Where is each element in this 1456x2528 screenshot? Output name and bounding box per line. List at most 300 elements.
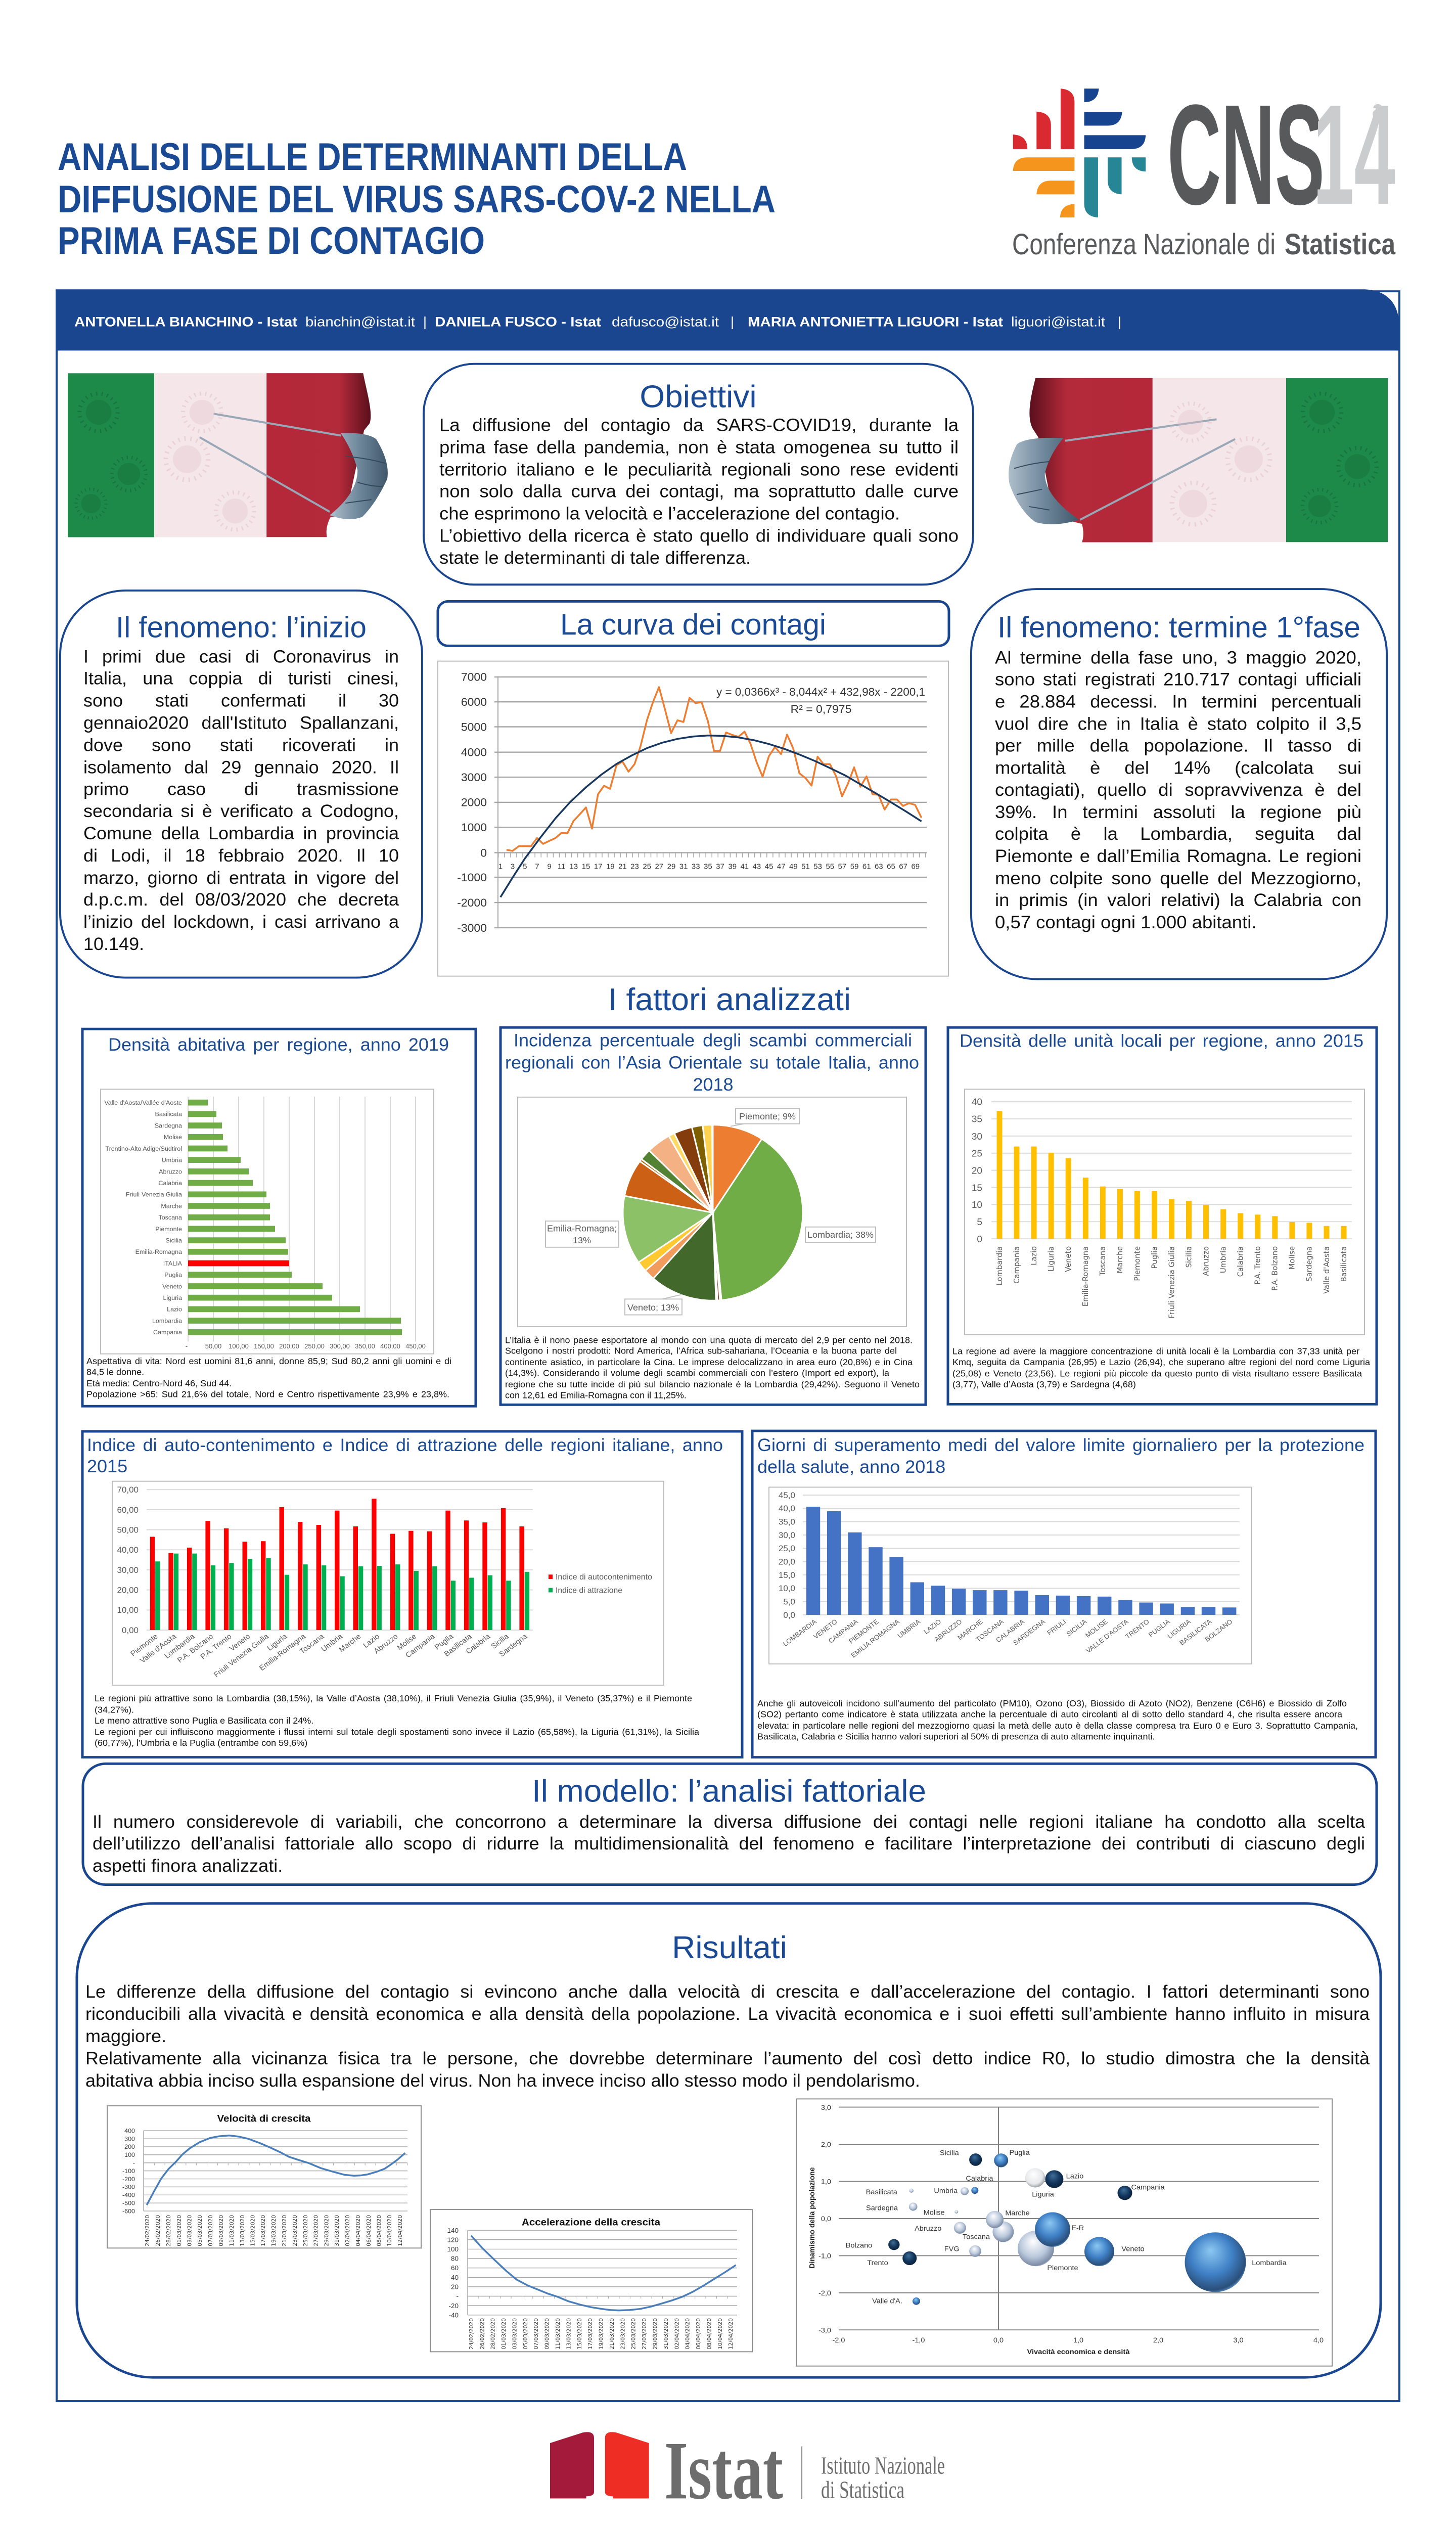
bar chart: giorni di superamento: MARCHE: [956, 1618, 984, 1641]
text block: unità locali: La regione ad avere la maggiore concentrazione di unità locali è la Lombardia con 37,33 unità per: [952, 1346, 1359, 1357]
bar chart: densità abitativa: Lombardia: [152, 1318, 182, 1324]
bar chart: unità locali: Sardegna: [1305, 1246, 1314, 1282]
chart: velocità di crescita: 07/03/2020: [207, 2215, 214, 2246]
bar chart: giorni di superamento: SARDEGNA: [1012, 1618, 1046, 1647]
equation: R² = 0,7975: [791, 702, 851, 715]
bar chart: indici regionali: Lazio: [362, 1633, 381, 1650]
bar chart: densità abitativa: 100,00: [229, 1342, 249, 1350]
bar chart: giorni di superamento: LOMBARDIA: [782, 1618, 818, 1648]
chart: curva dei contagi: 65: [887, 863, 895, 871]
bar chart: giorni di superamento: 30,0: [779, 1530, 795, 1540]
text block: autoveicoli: elevata: in particolare nelle regioni del mezzogiorno quasi la metà delle auto è della classe compresa tra Euro 0 e Euro 3. Soprattutto Campania,: [757, 1721, 1358, 1731]
chart: bubble chart of regions: Sardegna: [866, 2204, 898, 2213]
bar chart: unità locali: Puglia: [1150, 1246, 1159, 1269]
bar chart: giorni di superamento: EMILIA ROMAGNA: [849, 1618, 901, 1659]
bar chart: giorni di superamento: 25,0: [779, 1544, 795, 1553]
bar chart: indici regionali: 50,00: [117, 1525, 139, 1534]
chart: curva dei contagi: 45: [765, 863, 773, 871]
chart: bubble chart of regions: Basilicata: [866, 2188, 897, 2196]
main frame: [57, 291, 1399, 2401]
chart: velocità di crescita: 02/04/2020: [344, 2215, 351, 2246]
bar chart: densità abitativa: 300,00: [330, 1342, 350, 1350]
chart: curva dei contagi: 37: [716, 863, 724, 871]
chart: bubble chart of regions: -2,0: [833, 2336, 845, 2344]
bar chart: indici regionali: Calabria: [465, 1632, 492, 1656]
text block: attrattività: Le regioni più attrattive sono la Lombardia (38,15%), la Valle d’Aosta (38,10%), il Friuli Venezia Giulia (35,9%), il Veneto (35,37%) e il Piemonte: [95, 1694, 692, 1703]
chart: velocità di crescita: 17/03/2020: [260, 2215, 266, 2246]
bar chart: densità abitativa: ITALIA: [163, 1260, 183, 1267]
bar chart: giorni di superamento: ABRUZZO: [933, 1618, 963, 1643]
authors band: [56, 289, 1399, 350]
chart: accelerazione della crescita: -: [456, 2292, 459, 2300]
chart: bubble chart of regions: Lazio: [1066, 2173, 1083, 2181]
heading box: La curva dei contagi: La curva dei contagi: [560, 608, 826, 641]
bar chart: unità locali: 25: [972, 1148, 982, 1159]
chart title: 2015: [87, 1456, 127, 1476]
bar chart: indici regionali: 70,00: [117, 1485, 139, 1495]
text block: attrattività: (60,77%), l’Umbria e la Puglia (entrambe con 59,6%): [95, 1738, 307, 1748]
bar chart: densità abitativa: 350,00: [355, 1342, 375, 1350]
bar chart: densità abitativa: Campania: [153, 1329, 182, 1336]
chart: accelerazione della crescita: 04/04/2020: [685, 2318, 691, 2350]
bar chart: giorni di superamento: LAZIO: [922, 1618, 942, 1636]
text block: inizio: dove sono stati ricoverati in: [83, 735, 399, 755]
text block: risultati: Le differenze della diffusione del contagio si evincono anche dalla velocità di crescita e dall’accelerazione del contagio. I fattori determinanti sono: [85, 1981, 1370, 2001]
text block: export: continente asiatico, in particolare la Cina. Le imprese delocalizzano in area euro (20,8%) e in Cina: [505, 1357, 913, 1367]
chart: accelerazione della crescita: 01/03/2020: [500, 2318, 507, 2350]
callout: Piemonte: Piemonte; 9%: [739, 1111, 796, 1121]
text block: risultati: abitativa abbia inciso sulla espansione del virus. Non ha invece inciso allo stesso modo il pendolarismo.: [85, 2070, 920, 2090]
text block: objectives: [439, 414, 959, 572]
bar chart: densità abitativa: Emilia-Romagna: [135, 1248, 182, 1255]
bar chart: densità abitativa: 250,00: [304, 1342, 325, 1350]
text block: objectives: La diffusione del contagio da SARS-COVID19, durante la: [439, 415, 959, 435]
text block: modello: [93, 1811, 1365, 1880]
chart: bubble chart of regions: -1,0: [913, 2336, 925, 2344]
chart: curva dei contagi: 39: [728, 863, 737, 871]
authors band: |: [423, 314, 427, 329]
bar chart: giorni di superamento: [769, 1487, 1251, 1664]
chart: curva dei contagi: -1000: [457, 871, 487, 884]
text block: autoveicoli: (SO2) pertanto come indicatore è stata utilizzata anche la percentuale di auto circolanti al di sotto dello standard 4, che risulta essere ancora: [757, 1709, 1342, 1720]
bar chart: indici regionali: Veneto: [228, 1633, 252, 1653]
chart: bubble chart of regions: 4,0: [1313, 2336, 1324, 2344]
text block: inizio: 10.149.: [83, 934, 144, 954]
text block: objectives: che esprimono la velocità e l’accelerazione del contagio.: [439, 503, 900, 523]
chart: velocità di crescita: 11/03/2020: [229, 2215, 235, 2246]
chart: accelerazione della crescita: 120: [447, 2236, 459, 2244]
chart: bubble chart of regions: Umbria: [934, 2187, 958, 2195]
chart: curva dei contagi: 15: [582, 863, 590, 871]
text block: unità locali: (3,77), Valle d’Aosta (3,79) e Sardegna (4,68): [952, 1379, 1136, 1389]
chart: curva dei contagi: 13: [569, 863, 578, 871]
chart: velocità di crescita: Velocità di crescita: [217, 2113, 311, 2124]
chart: bubble chart of regions: 1,0: [1073, 2336, 1083, 2344]
chart: curva dei contagi: 23: [630, 863, 639, 871]
bar chart: densità abitativa: Puglia: [164, 1272, 182, 1279]
bar chart: indici regionali: Abruzzo: [373, 1633, 399, 1655]
chart: accelerazione della crescita: 20: [451, 2283, 459, 2290]
chart: velocità di crescita: -: [133, 2159, 135, 2166]
chart: curva dei contagi: 5000: [461, 720, 487, 733]
text block: risultati: riconducibili alla vivacità e densità economica e alla densità della popolazione. La vivacità economica e i suoi effetti sull’ambiente hanno influito in misura: [85, 2003, 1370, 2023]
chart: curva dei contagi: 4000: [461, 746, 487, 758]
bar chart: densità abitativa: Valle d'Aosta/Vallée d'Aoste: [104, 1099, 182, 1106]
chart: curva dei contagi: 69: [911, 863, 920, 871]
bar chart: giorni di superamento: BASILICATA: [1178, 1618, 1213, 1647]
text block: inizio: l’inizio del lockdown, i casi arrivano a: [83, 912, 399, 932]
chart: accelerazione della crescita: 31/03/2020: [663, 2318, 669, 2350]
authors band: DANIELA FUSCO - Istat: [435, 314, 601, 329]
bar chart: unità locali: 15: [972, 1183, 982, 1193]
chart: bubble chart of regions: Calabria: [966, 2175, 993, 2183]
bar chart: densità abitativa: Umbria: [162, 1157, 182, 1163]
panel: Obiettivi: [424, 364, 973, 584]
text block: attrattività: [95, 1693, 721, 1750]
chart: velocità di crescita: 09/03/2020: [218, 2215, 224, 2246]
bar chart: indici regionali: P.A. Bolzano: [176, 1633, 215, 1664]
text block: export: L’Italia è il nono paese esportatore al mondo con una quota di mercato del 2,9 per cento nel 2018.: [505, 1335, 913, 1345]
image: Italian flag with mask, left: [68, 373, 388, 537]
logo: Istat: [550, 2424, 945, 2516]
panel: densità abitativa: [82, 1029, 476, 1406]
bar chart: unità locali: P.A. Trento: [1253, 1246, 1262, 1285]
text block: export: [505, 1335, 922, 1402]
panel: Il fenomeno, l'inizio: [60, 591, 422, 978]
text block: modello: aspetti finora analizzati.: [93, 1856, 283, 1876]
text block: inizio: gennaio2020 dall'Istituto Spallanzani,: [83, 712, 399, 733]
bar chart: giorni di superamento: 10,0: [779, 1584, 795, 1593]
text block: attrattività: (34,27%).: [95, 1705, 134, 1714]
bar chart: indici regionali: Emilia-Romagna: [258, 1632, 307, 1673]
text block: termine: Piemonte e dall’Emilia Romagna. Le regioni: [995, 846, 1361, 866]
bar chart: unità locali: 40: [972, 1097, 982, 1107]
bar chart: unità locali: Calabria: [1236, 1246, 1245, 1277]
bar chart: indici regionali: 60,00: [117, 1505, 139, 1515]
chart: accelerazione della crescita: 19/03/2020: [598, 2318, 605, 2350]
bar chart: giorni di superamento: 20,0: [779, 1557, 795, 1566]
text block: inizio: secondaria si è verificato a Codogno,: [83, 801, 399, 821]
chart: bubble chart of regions: -2,0: [818, 2289, 831, 2297]
chart: velocità di crescita: 08/04/2020: [376, 2215, 383, 2246]
chart: curva dei contagi: 61: [862, 863, 871, 871]
chart: velocità di crescita: 21/03/2020: [281, 2215, 288, 2246]
chart: accelerazione della crescita: 08/04/2020: [706, 2318, 712, 2350]
text block: termine: Al termine della fase uno, 3 maggio 2020,: [995, 647, 1361, 667]
text block: risultati: maggiore.: [85, 2025, 166, 2046]
bar chart: densità abitativa: Veneto: [162, 1283, 182, 1290]
bar chart: unità locali: Toscana: [1099, 1246, 1107, 1276]
bar chart: indici regionali: Marche: [338, 1633, 362, 1654]
logo: CNS 14 Conferenza Nazionale di Statistica: [1012, 74, 1396, 261]
chart: bubble chart of regions: Campania: [1131, 2184, 1165, 2191]
heading: Obiettivi: Obiettivi: [640, 379, 757, 414]
bar chart: densità abitativa: Sardegna: [155, 1122, 182, 1129]
chart: velocità di crescita: 05/03/2020: [197, 2215, 203, 2246]
chart: velocità di crescita: 04/04/2020: [355, 2215, 361, 2246]
chart: bubble chart of regions: -3,0: [818, 2326, 831, 2334]
bar chart: unità locali: Lazio: [1030, 1246, 1038, 1266]
text block: unità locali: (25,08) e Veneto (23,56). Le regioni più piccole da questo punto di vista risultano essere Basilicata: [952, 1369, 1362, 1378]
bar chart: indici regionali: Piemonte: [129, 1633, 159, 1658]
chart: curva dei contagi: 43: [753, 863, 761, 871]
bar chart: densità abitativa: Molise: [164, 1134, 182, 1141]
bar chart: densità abitativa: Calabria: [158, 1180, 182, 1187]
chart: velocità di crescita: 26/02/2020: [155, 2215, 161, 2246]
chart: curva dei contagi: 5: [523, 863, 527, 871]
text block: termine: in primis (in valori relativi) la Calabria con: [995, 890, 1361, 910]
panel: Il modello: [83, 1764, 1377, 1885]
chart: velocità di crescita: -400: [122, 2192, 135, 2199]
bar chart: unità locali: 30: [972, 1131, 982, 1142]
chart: velocità di crescita: -200: [122, 2176, 135, 2183]
bar chart: unità locali: Veneto: [1064, 1246, 1073, 1272]
bar chart: unità locali: Lombardia: [995, 1246, 1004, 1285]
panel: auto-contenimento e attrazione: [82, 1431, 742, 1757]
chart: curva dei contagi: 25: [643, 863, 651, 871]
text block: autoveicoli: Basilicata, Calabria e Sicilia hanno valori superiori al 50% di presenza di auto altamente inquinanti.: [757, 1732, 1155, 1742]
text block: export: (14,3%). Considerando il volume degli scambi commerciali con l’estero (Import ed export), la: [505, 1368, 889, 1378]
chart: accelerazione della crescita: 13/03/2020: [565, 2318, 572, 2350]
text block: export: con 12,61 ed Emilia-Romagna con il 11,25%.: [505, 1390, 687, 1401]
chart: velocità di crescita: -500: [122, 2199, 135, 2206]
heading box: La curva dei contagi: [438, 601, 949, 646]
bar chart: giorni di superamento: LIGURIA: [1166, 1618, 1192, 1640]
bar chart: unità locali: 0: [977, 1234, 982, 1244]
chart title: 2018: [693, 1074, 734, 1095]
bar chart: indici regionali: 20,00: [117, 1586, 139, 1595]
chart: curva dei contagi: 51: [801, 863, 810, 871]
text block: inizio: primo caso di trasmissione: [83, 779, 399, 799]
bar chart: indici regionali: 40,00: [117, 1545, 139, 1555]
legend: Indice di attrazione: [556, 1587, 622, 1595]
bar chart: indici regionali: Friuli Venezia Giulia: [212, 1632, 270, 1679]
chart: curva dei contagi: 9: [547, 863, 552, 871]
bar chart: unità locali: 5: [977, 1216, 982, 1227]
chart: accelerazione della crescita: 10/04/2020: [717, 2318, 723, 2350]
chart: bubble chart of regions: 2,0: [1153, 2336, 1163, 2344]
chart title: Densità abitativa per regione, anno 2019: [108, 1034, 449, 1055]
text block: autoveicoli: [757, 1698, 1372, 1743]
chart: velocità di crescita: 15/03/2020: [249, 2215, 256, 2246]
panel: densità unità locali: [948, 1027, 1377, 1404]
chart: curva dei contagi: 49: [789, 863, 798, 871]
text block: attrattività: Le meno attrattive sono Puglia e Basilicata con il 24%.: [95, 1716, 313, 1726]
title: ANALISI DELLE DETERMINANTI DELLA: [58, 136, 687, 178]
logo: Istat: di Statistica: [821, 2476, 904, 2503]
callout: Lombardia: [805, 1227, 876, 1242]
chart: velocità di crescita: 25/03/2020: [302, 2215, 309, 2246]
text block: aspettativa di vita: Aspettativa di vita: Nord est uomini 81,6 anni, donne 85,9; Sud 80,2 anni gli uomini e di: [86, 1357, 451, 1366]
bar chart: giorni di superamento: TRENTO: [1124, 1618, 1151, 1641]
chart: accelerazione della crescita: 28/02/2020: [490, 2318, 496, 2350]
text block: termine: per mille della popolazione. Il tasso di: [995, 735, 1361, 756]
callout: Veneto: [625, 1295, 682, 1315]
chart: curva dei contagi: -2000: [457, 896, 487, 909]
callout: Piemonte: [731, 1108, 799, 1126]
bar chart: indici regionali: 10,00: [117, 1605, 139, 1615]
chart: velocità di crescita: 06/04/2020: [366, 2215, 372, 2246]
text block: objectives: L’obiettivo della ricerca è stato quello di individuare quali sono: [439, 525, 959, 546]
text block: inizio: d.p.c.m. del 08/03/2020 che decreta: [83, 889, 399, 910]
chart: accelerazione della crescita: 26/02/2020: [479, 2318, 485, 2350]
text block: aspettativa di vita: [86, 1356, 461, 1401]
authors band: |: [1118, 314, 1121, 329]
chart: bubble chart of regions: Valle d'A.: [872, 2297, 902, 2306]
chart: bubble chart of regions: 2,0: [821, 2141, 831, 2149]
chart: curva dei contagi: 3000: [461, 771, 487, 784]
logo: Istat: Istat: [664, 2424, 783, 2516]
bar chart: giorni di superamento: TOSCANA: [974, 1618, 1005, 1643]
text block: inizio: sono stati confermati il 30: [83, 690, 399, 710]
chart: bubble chart of regions: Sicilia: [940, 2149, 959, 2157]
line: polynomial trend: [500, 736, 922, 897]
chart: accelerazione della crescita: 40: [451, 2274, 459, 2281]
callout: Emilia-Romagna: Emilia-Romagna;: [547, 1224, 617, 1233]
chart: accelerazione della crescita: 21/03/2020: [609, 2318, 615, 2350]
bar chart: giorni di superamento: 40,0: [779, 1504, 795, 1513]
bar chart: densità abitativa: Sicilia: [165, 1237, 182, 1244]
bar chart: unità locali: Abruzzo: [1202, 1246, 1211, 1276]
chart: curva dei contagi: -3000: [457, 921, 487, 934]
text block: termine: e 28.884 decessi. In termini percentuali: [995, 691, 1361, 711]
chart: velocità di crescita: 03/03/2020: [186, 2215, 193, 2246]
chart: velocità di crescita: 400: [124, 2128, 135, 2135]
bar chart: indici regionali: Puglia: [433, 1632, 456, 1651]
chart: velocità di crescita: 24/02/2020: [144, 2215, 151, 2246]
bar chart: densità abitativa: 200,00: [279, 1342, 299, 1350]
image: Italian flag with mask, right: [1009, 378, 1388, 542]
authors band: |: [731, 314, 734, 329]
chart: accelerazione della crescita: [430, 2209, 752, 2352]
chart: curva dei contagi: 19: [606, 863, 615, 871]
text block: inizio: I primi due casi di Coronavirus in: [83, 646, 399, 666]
bar chart: indici regionali: Liguria: [266, 1632, 289, 1652]
chart: accelerazione della crescita: 11/03/2020: [555, 2318, 561, 2350]
line: daily cases: [507, 687, 922, 851]
text block: inizio: [83, 646, 399, 962]
text block: inizio: isolamento dal 29 gennaio 2020. Il: [83, 757, 399, 777]
bar chart: indici regionali: P.A. Trento: [199, 1633, 233, 1661]
chart: velocità di crescita: 19/03/2020: [270, 2215, 277, 2246]
bar chart: densità abitativa: Trentino-Alto Adige/Südtirol: [105, 1145, 182, 1152]
bar chart: unità locali: 20: [972, 1165, 982, 1176]
chart: velocità di crescita: 200: [124, 2143, 135, 2150]
chart title: [500, 1029, 926, 1096]
chart: accelerazione della crescita: 03/03/2020: [511, 2318, 518, 2350]
chart: accelerazione della crescita: Accelerazione della crescita: [522, 2217, 661, 2228]
text block: risultati: [85, 1980, 1370, 2094]
chart: accelerazione della crescita: 12/04/2020: [727, 2318, 734, 2350]
chart: velocità di crescita: -600: [122, 2208, 135, 2215]
chart: accelerazione della crescita: 29/03/2020: [652, 2318, 659, 2350]
chart: velocità di crescita: -300: [122, 2184, 135, 2191]
bar chart: unità locali: Friuli Venezia Giulia: [1167, 1246, 1176, 1319]
bar chart: giorni di superamento: CALABRIA: [994, 1618, 1026, 1644]
chart: accelerazione della crescita: 24/02/2020: [468, 2318, 475, 2350]
bar chart: indici regionali: Umbria: [320, 1632, 344, 1653]
heading: Il fenomeno l'inizio: Il fenomeno: l’inizio: [116, 610, 367, 644]
bar chart: giorni di superamento: UMBRIA: [896, 1618, 922, 1640]
chart: bubble chart of regions: Liguria: [1032, 2191, 1054, 2199]
chart: bubble chart of regions: Veneto: [1121, 2245, 1145, 2253]
bar chart: giorni di superamento: 0,0: [783, 1610, 795, 1620]
text block: unità locali: Kmq, seguita da Campania (26,95) e Lazio (26,94), che superano altre regioni del nord come Liguria: [952, 1358, 1370, 1367]
title: [58, 136, 776, 262]
chart: curva dei contagi: 29: [667, 863, 675, 871]
bar chart: indici regionali: Molise: [396, 1633, 418, 1652]
chart: bubble chart of regions: Toscana: [963, 2233, 990, 2241]
chart: velocità di crescita: 31/03/2020: [334, 2215, 340, 2246]
chart: bubble chart of regions: -1,0: [818, 2252, 831, 2260]
logo: Istat: Istituto Nazionale: [821, 2452, 945, 2479]
bar chart: densità abitativa: Friuli-Venezia Giulia: [126, 1191, 182, 1198]
chart: accelerazione della crescita: 07/03/2020: [533, 2318, 539, 2350]
chart title: della salute, anno 2018: [757, 1457, 945, 1477]
bar chart: densità abitativa: -: [186, 1342, 188, 1350]
bar chart: unità locali: Basilicata: [1340, 1246, 1348, 1282]
chart: bubble chart of regions: Trento: [867, 2259, 888, 2267]
bar chart: densità abitativa: Basilicata: [155, 1111, 182, 1118]
bar chart: indici regionali: Campania: [404, 1632, 437, 1659]
text block: modello: dell’utilizzo dell’analisi fattoriale allo scopo di ridurre la multidimensionalità del fenomeno e facilitare l’interpretazione dei contributi di ciascuno degli: [93, 1833, 1365, 1854]
bar chart: giorni di superamento: 5,0: [783, 1597, 795, 1606]
authors band: dafusco@istat.it: [612, 314, 719, 329]
text block: objectives: non solo dalla curva dei contagi, ma soprattutto dalle curve: [439, 481, 959, 502]
callout: Emilia-Romagna: 13%: [573, 1235, 591, 1245]
bar chart: giorni di superamento: CAMPANIA: [827, 1618, 859, 1645]
axis title: Vivacità economica e densità: [1027, 2348, 1130, 2356]
chart: curva dei contagi: 47: [777, 863, 786, 871]
bar chart: indici regionali: Lombardia: [163, 1632, 197, 1660]
title: DIFFUSIONE DEL VIRUS SARS-COV-2 NELLA: [58, 178, 776, 221]
text block: inizio: marzo, giorno di entrata in vigore del: [83, 867, 399, 887]
bar chart: densità abitativa: Liguria: [163, 1294, 182, 1301]
text block: attrattività: Le regioni per cui influiscono maggiormente i flussi interni sul totale degli spostamenti sono invece il Lazio (65,58%), la Liguria (61,31%), la Sicilia: [95, 1727, 699, 1737]
bar chart: unità locali: Valle d'Aosta: [1323, 1246, 1331, 1294]
text block: aspettativa di vita: Popolazione >65: Sud 21,6% del totale, Nord e Centro rispettivamente 23,9% e 23,8%.: [86, 1389, 449, 1399]
chart: bubble chart of regions: Piemonte: [1047, 2264, 1078, 2272]
chart: bubble chart of regions: E-R: [1071, 2224, 1084, 2232]
bar chart: unità locali: Campania: [1013, 1246, 1021, 1284]
text block: termine: colpita è la Lombardia, seguita dal: [995, 824, 1361, 844]
panel: Risultati: [77, 1904, 1381, 2377]
authors band: liguori@istat.it: [1011, 314, 1106, 329]
chart title: [87, 1434, 723, 1479]
chart: curva dei contagi: 55: [826, 863, 834, 871]
text block: objectives: territorio italiano e le peculiarità regionali sono rese evidenti: [439, 459, 959, 479]
pie chart: regional share: [518, 1097, 906, 1327]
chart: accelerazione della crescita: 60: [451, 2264, 459, 2272]
chart: curva dei contagi: 57: [838, 863, 846, 871]
callout: Emilia-Romagna: [545, 1221, 619, 1247]
bar chart: densità abitativa: Marche: [161, 1202, 182, 1209]
chart: curva dei contagi: 2000: [461, 796, 487, 809]
chart: curva dei contagi: 53: [813, 863, 822, 871]
bar chart: densità abitativa: 400,00: [380, 1342, 400, 1350]
text block: termine: 0,57 contagi ogni 1.000 abitanti.: [995, 912, 1257, 932]
bar chart: unità locali: Marche: [1116, 1246, 1124, 1273]
equation: [716, 685, 925, 715]
text block: inizio: Comune della Lombardia in provincia: [83, 823, 399, 843]
bar chart: indici regionali: 30,00: [117, 1565, 139, 1575]
bar chart: unità locali: 10: [972, 1199, 982, 1210]
bar chart: giorni di superamento: PUGLIA: [1147, 1618, 1171, 1639]
bar chart: giorni di superamento: VENETO: [812, 1618, 839, 1641]
heading: Il fenomeno termine: Il fenomeno: termine 1°fase: [997, 610, 1360, 644]
bar chart: giorni di superamento: VALLE D'AOSTA: [1084, 1618, 1130, 1655]
heading: Risultati: Risultati: [672, 1930, 787, 1965]
